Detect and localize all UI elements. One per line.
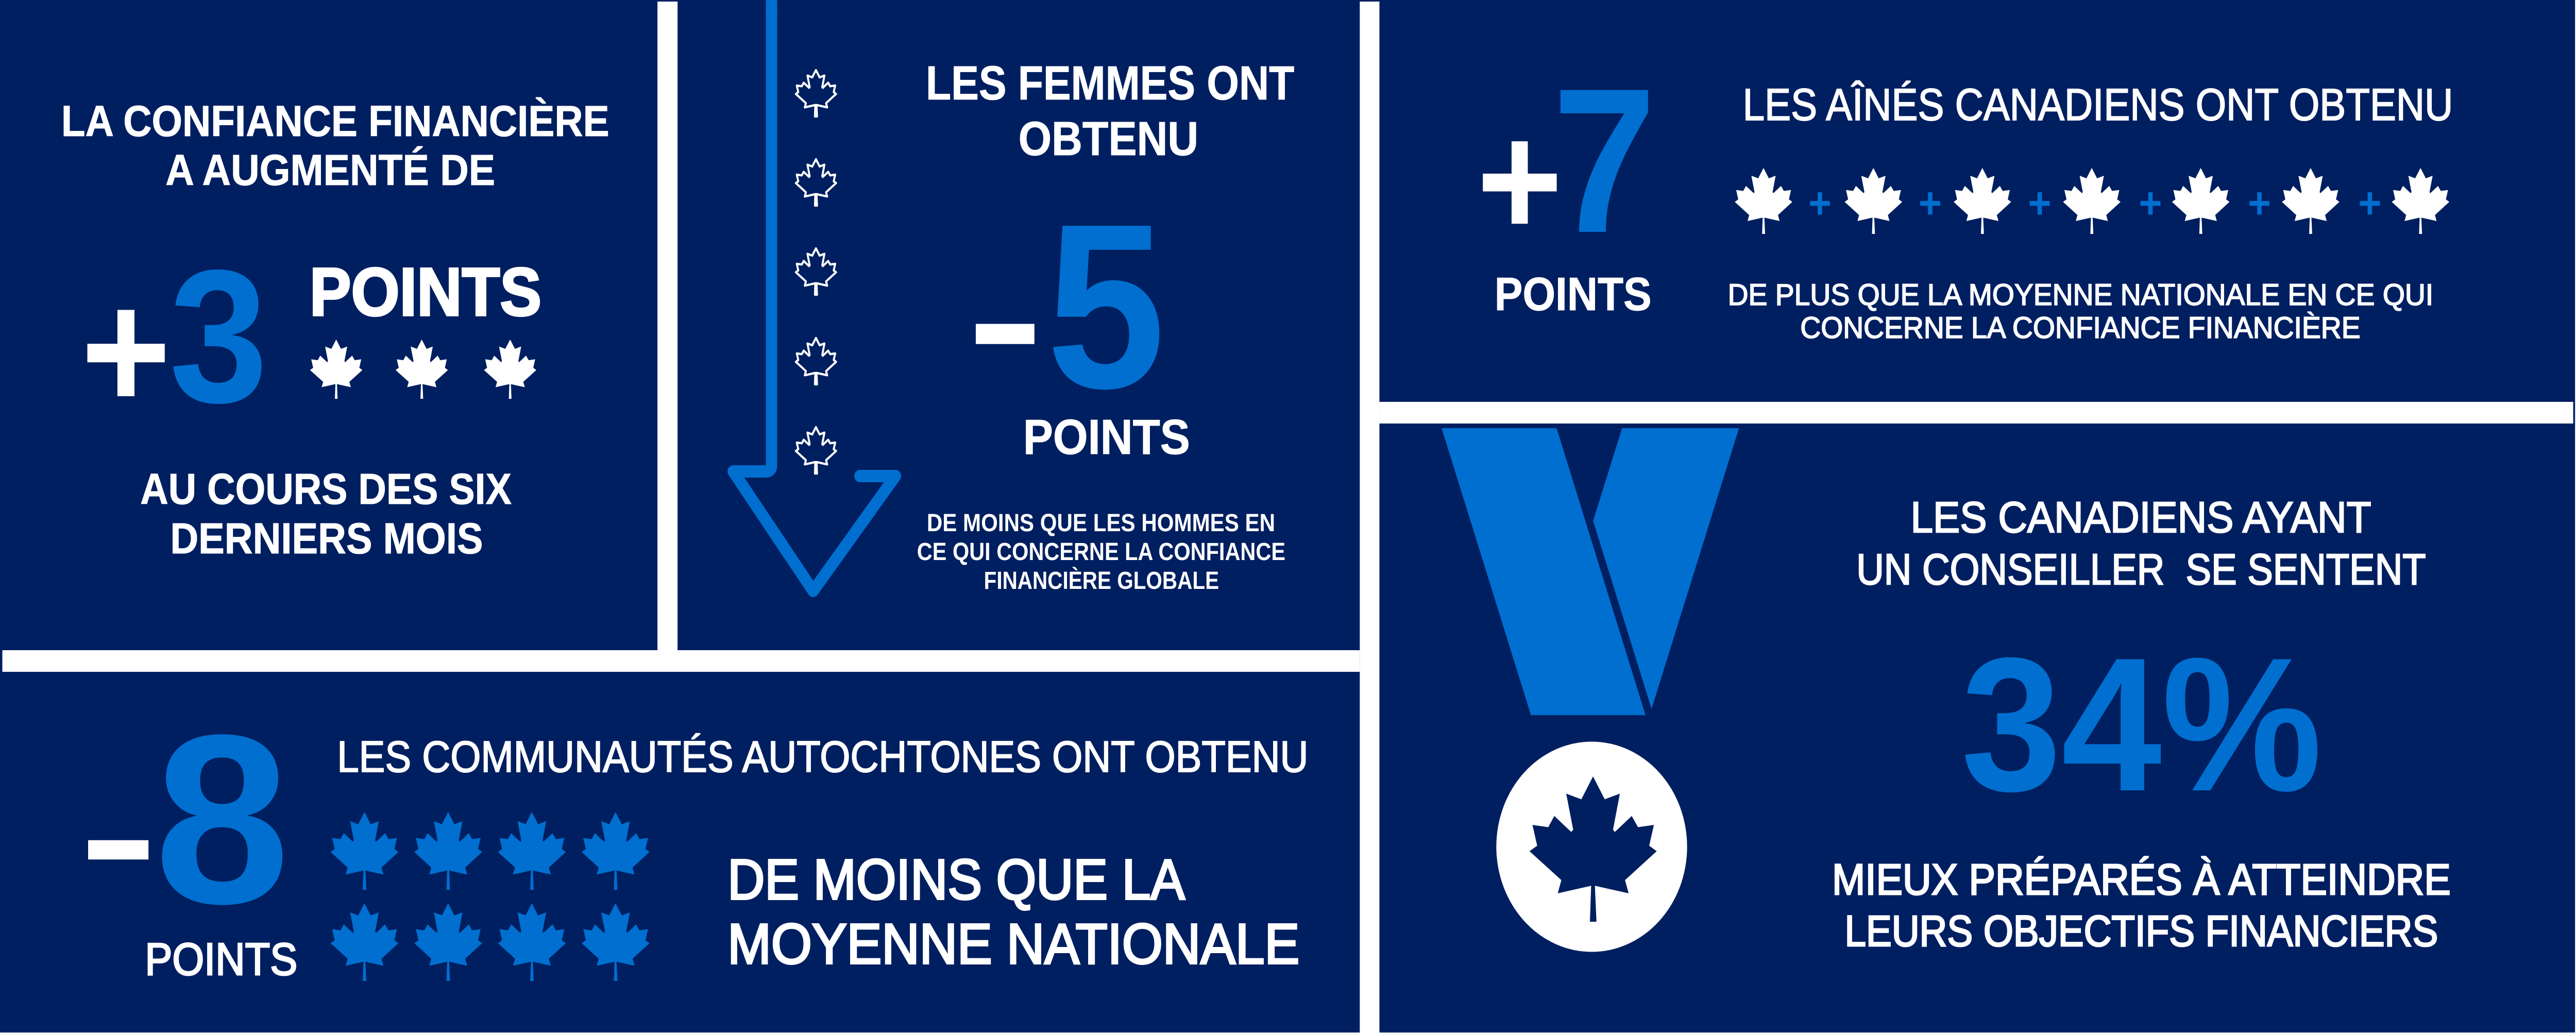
panel: indigenous communities (77, 684, 1308, 985)
text: better prepared: LEURS OBJECTIFS FINANCIERS (1845, 907, 2438, 955)
text: less than men: FINANCIÈRE GLOBALE (984, 567, 1219, 594)
text: over six months (140, 465, 512, 563)
text: less than national average: DE MOINS QUE LA (727, 849, 1185, 911)
minus sign: - (965, 170, 1045, 458)
heading: women (926, 56, 1294, 165)
heading: confidence increased (61, 97, 609, 194)
text: less than national average: MOYENNE NATIONALE (727, 913, 1299, 976)
text: less than men: CE QUI CONCERNE LA CONFIANCE (917, 538, 1285, 565)
icon: down arrow (733, 0, 895, 591)
blue plus signs: + (1808, 179, 1832, 228)
icons: seven white maple leaves (1735, 168, 2449, 234)
panel: women (733, 0, 1294, 594)
label: points: POINTS (145, 934, 297, 985)
panel: confidence increased (61, 97, 609, 563)
blue plus signs: + (2358, 179, 2381, 228)
heading: confidence increased: LA CONFIANCE FINANCIÈRE (61, 97, 609, 145)
minus sign: - (77, 692, 159, 969)
text: over six months: AU COURS DES SIX (140, 465, 512, 513)
medal maple leaf (1530, 776, 1657, 922)
medal disc (1496, 742, 1687, 952)
blue plus signs: + (2139, 179, 2162, 228)
text: over six months: DERNIERS MOIS (170, 514, 483, 563)
heading: advisor (1856, 493, 2426, 594)
icons: five outlined maple leaves (796, 70, 836, 473)
text: less than men (917, 509, 1285, 594)
label: points: POINTS (1023, 410, 1190, 465)
plus sign: + (1477, 90, 1563, 271)
number 8: 8 (155, 684, 290, 954)
text: above national average: CONCERNE LA CONFIANCE FINANCIÈRE (1800, 311, 2361, 345)
heading: indigenous communities: LES COMMUNAUTÉS AUTOCHTONES ONT OBTENU (337, 733, 1308, 782)
text: better prepared (1832, 855, 2451, 955)
blue plus signs: + (2028, 179, 2052, 228)
blue plus signs: + (2248, 179, 2271, 228)
blue plus signs: + (1919, 179, 1942, 228)
number 3: 3 (170, 231, 268, 443)
number 5: 5 (1046, 175, 1165, 437)
heading: advisor: LES CANADIENS AYANT (1910, 493, 2371, 541)
icon: medal (1442, 428, 1739, 952)
plus sign: + (81, 256, 171, 446)
panel: advisor (1442, 428, 2451, 955)
icons: three white maple leaves (310, 340, 536, 399)
heading: seniors: LES AÎNÉS CANADIENS ONT OBTENU (1743, 79, 2453, 130)
label: points: POINTS (1495, 268, 1652, 320)
medal ribbon (1442, 428, 1739, 715)
heading: confidence increased: A AUGMENTÉ DE (165, 146, 495, 194)
text: above national average (1728, 278, 2433, 345)
number 34%: 34% (1961, 618, 2322, 831)
text: better prepared: MIEUX PRÉPARÉS À ATTEINDRE (1832, 855, 2451, 904)
panel: seniors (1477, 45, 2453, 345)
heading: women: OBTENU (1019, 112, 1198, 165)
icons: eight blue maple leaves (331, 812, 650, 981)
heading: women: LES FEMMES ONT (926, 56, 1294, 110)
text: less than men: DE MOINS QUE LES HOMMES EN (927, 509, 1275, 536)
blue plus signs (1808, 179, 2381, 228)
label: points: POINTS (310, 254, 541, 330)
text: above national average: DE PLUS QUE LA MOYENNE NATIONALE EN CE QUI (1728, 278, 2433, 312)
text: less than national average (727, 849, 1299, 976)
heading: advisor: UN CONSEILLER SE SENTENT (1856, 545, 2426, 594)
number 7: 7 (1552, 45, 1656, 276)
